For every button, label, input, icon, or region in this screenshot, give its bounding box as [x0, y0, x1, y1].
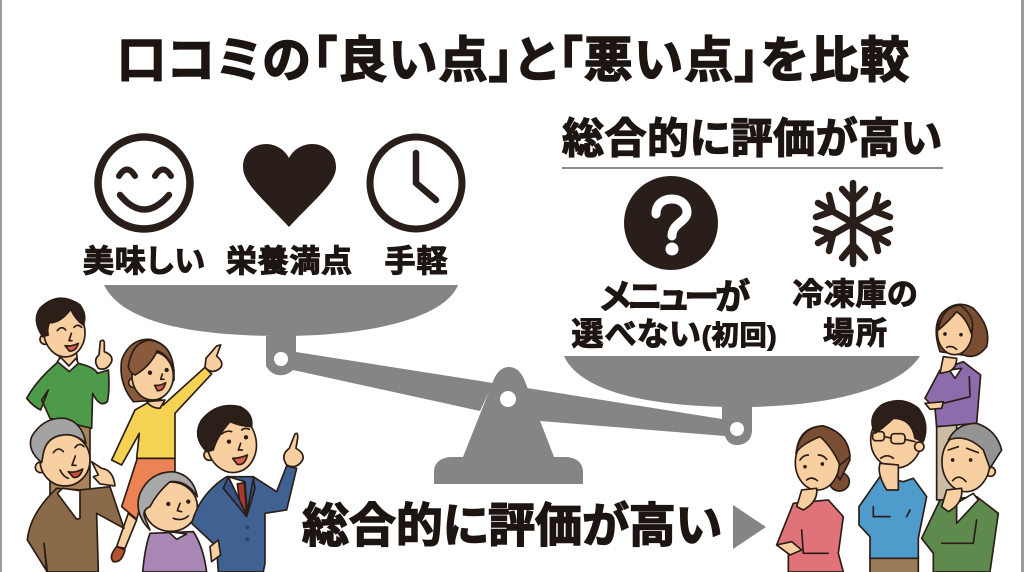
pivot pins — [274, 352, 744, 436]
icon: snowflake — [816, 183, 890, 264]
person: man with glasses in blue — [859, 401, 927, 572]
person: elderly man in brown — [27, 418, 124, 572]
label: 美味しい: 美味しい — [83, 244, 205, 279]
person: woman in yellow — [111, 339, 222, 562]
right pan — [527, 356, 920, 445]
icon: question mark — [624, 176, 718, 270]
left pan — [104, 285, 493, 411]
title: 口コミの「良い点」と「悪い点」を比較 — [117, 34, 909, 88]
people: concerned group — [777, 304, 1002, 572]
label: 選べない(初回): 選べない(初回) — [572, 316, 776, 352]
person: man in green — [27, 298, 112, 497]
icon: heart — [243, 144, 336, 227]
person: woman in purple — [925, 304, 988, 500]
conclusion text: 総合的に評価が高い — [302, 499, 722, 552]
divider rule — [562, 167, 943, 169]
people: satisfied group — [27, 298, 303, 572]
person: elderly woman in purple — [138, 472, 207, 572]
label: 冷凍庫の: 冷凍庫の — [792, 277, 918, 312]
icon: clock — [370, 137, 462, 229]
heading: right side: 総合的に評価が高い — [562, 115, 942, 162]
arrow — [733, 505, 766, 549]
fulcrum — [434, 367, 583, 484]
label: 栄養満点: 栄養満点 — [226, 244, 352, 279]
person: elderly man in green — [922, 423, 1002, 572]
label: 手軽: 手軽 — [384, 244, 448, 279]
balance scale — [104, 285, 920, 484]
icon: smiley — [98, 137, 190, 229]
person: man in blue suit — [192, 406, 303, 572]
label: メニューが: メニューが — [600, 278, 750, 317]
label: 場所: 場所 — [823, 316, 887, 351]
person: woman in pink — [777, 426, 850, 572]
